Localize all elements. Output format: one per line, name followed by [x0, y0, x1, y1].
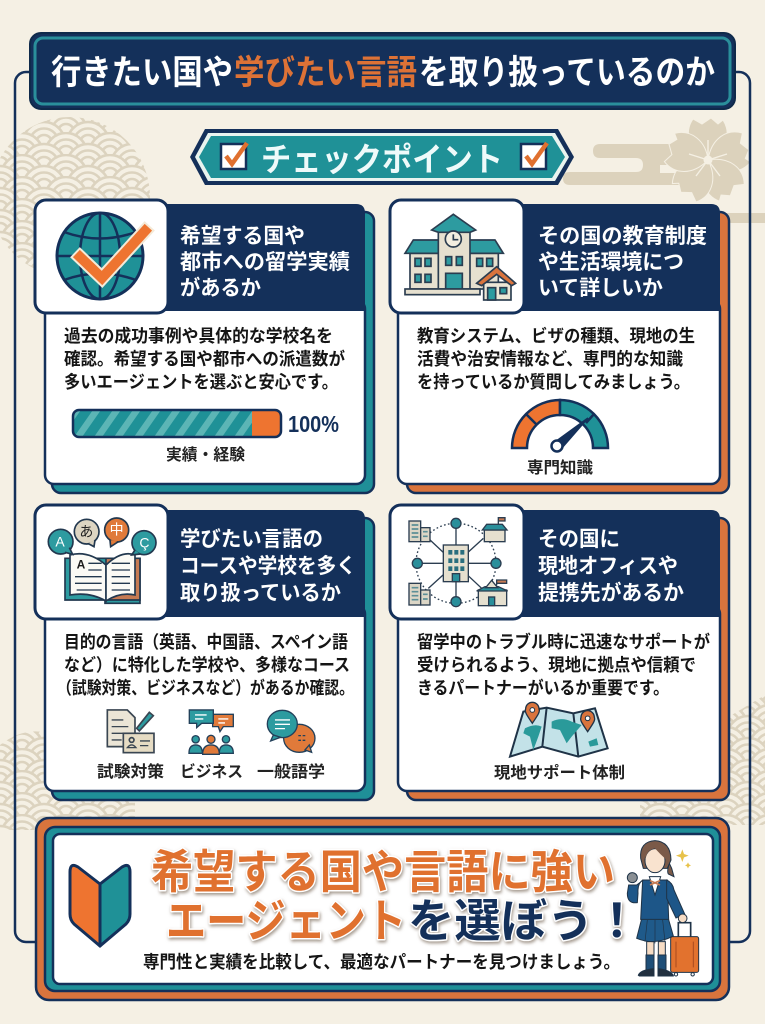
heading: 現地オフィスや — [538, 555, 678, 578]
icon: open book with language bubbles: あ — [79, 523, 93, 539]
body text: 留学中のトラブル時に迅速なサポートが — [417, 632, 710, 652]
icon: business team — [189, 710, 233, 754]
body text — [417, 632, 710, 698]
title banner: 学びたい言語 — [234, 54, 417, 92]
icon: beginner mark — [70, 865, 130, 946]
title banner: 行きたい国や — [51, 54, 233, 92]
heading — [180, 225, 350, 300]
icon: map with pins — [510, 702, 608, 757]
labels: 一般語学 — [257, 762, 325, 781]
progress bar: 100% — [288, 411, 339, 437]
icon: open book with language bubbles: Ç — [139, 535, 149, 551]
label: 実績・経験 — [166, 446, 245, 464]
icon: open book with language bubbles: A — [77, 557, 86, 571]
body text: きるパートナーがいるか重要です。 — [417, 678, 669, 698]
heading: いて詳しいか — [538, 277, 663, 300]
body text: を持っているか質問してみましょう。 — [417, 372, 690, 392]
background pattern: wave bottom left — [0, 731, 135, 830]
icon: school and house — [405, 214, 516, 300]
heading: 希望する国や — [180, 225, 305, 248]
icon: checkbox right — [521, 143, 547, 169]
icon: open book with language bubbles — [48, 518, 156, 603]
label: 現地サポート体制 — [494, 764, 625, 782]
body text — [57, 632, 354, 698]
background pattern: wave bottom right — [640, 695, 765, 825]
body text — [64, 326, 345, 392]
labels: ビジネス — [180, 762, 243, 781]
heading: 取り扱っているか — [180, 582, 341, 605]
decoration: cloud and cherry blossom — [563, 118, 765, 223]
body text: など）に特化した学校や、多様なコース — [64, 655, 350, 675]
body text — [417, 326, 695, 392]
body text: 過去の成功事例や具体的な学校名を — [64, 326, 333, 346]
panel: track record — [35, 200, 374, 493]
call to action: エージェント — [166, 895, 406, 947]
title banner — [30, 33, 735, 109]
body text: 多いエージェントを選ぶと安心です。 — [64, 372, 338, 392]
heading — [538, 528, 684, 605]
body text: 教育システム、ビザの種類、現地の生 — [417, 326, 695, 346]
background pattern: wave top left — [0, 117, 150, 277]
heading — [180, 528, 356, 605]
check point badge: チェックポイント — [261, 141, 503, 178]
conclusion banner — [36, 818, 729, 1000]
heading: 都市への留学実績 — [180, 251, 350, 274]
heading: 提携先があるか — [538, 581, 684, 605]
call to action: 希望する国や言語に強い — [151, 846, 615, 898]
call to action — [151, 846, 640, 947]
check point badge — [190, 129, 574, 185]
title banner: を取り扱っているのか — [419, 54, 715, 92]
gauge — [512, 400, 608, 452]
subtitle: 専門性と実績を比較して、最適なパートナーを見つけましょう。 — [143, 952, 620, 972]
heading: や生活環境につ — [538, 251, 684, 274]
icon: office network — [409, 518, 508, 607]
progress bar — [73, 410, 339, 437]
illustration: student with suitcase — [627, 841, 699, 976]
icon: open book with language bubbles: 中 — [110, 521, 124, 537]
icon: speech bubbles — [267, 710, 315, 752]
body text: 活費や治安情報など、専門的な知識 — [417, 349, 683, 369]
body text: 受けられるよう、現地に拠点や信頼で — [417, 655, 696, 675]
labels: 試験対策 — [97, 762, 164, 781]
call to action: を選ぼう！ — [408, 895, 640, 947]
heading: その国に — [538, 528, 620, 551]
body text: 確認。希望する国や都市への派遣数が — [64, 349, 345, 369]
heading: コースや学校を多く — [180, 555, 356, 578]
panel: languages — [35, 505, 374, 800]
icon: checkbox left — [221, 143, 247, 169]
heading: 学びたい言語の — [180, 528, 323, 551]
icon: exam documents — [107, 710, 154, 753]
panel: local support — [390, 505, 729, 800]
panel: expertise — [390, 200, 729, 493]
label: 専門知識 — [527, 458, 593, 477]
heading — [538, 225, 707, 300]
body text: （試験対策、ビジネスなど）があるか確認。 — [57, 678, 354, 698]
heading: その国の教育制度 — [538, 225, 707, 248]
icon: globe with check — [57, 213, 145, 299]
body text: 目的の言語（英語、中国語、スペイン語 — [64, 632, 348, 652]
labels — [97, 762, 325, 781]
icon: open book with language bubbles: A — [55, 533, 65, 549]
heading: があるか — [180, 276, 261, 300]
